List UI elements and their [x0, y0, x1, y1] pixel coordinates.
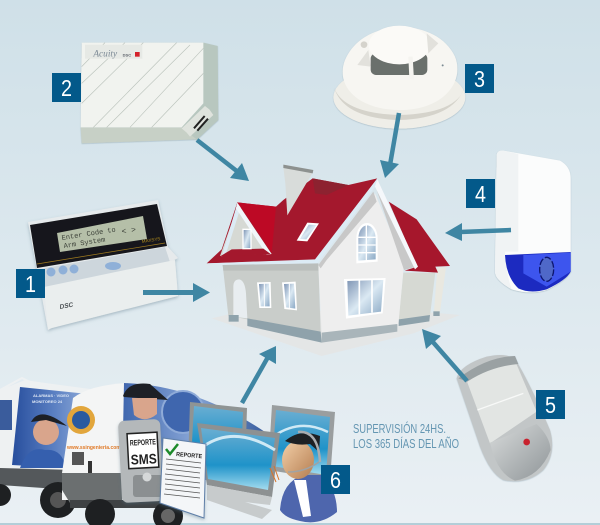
device 1: keypad: MAXSYS [141, 236, 161, 244]
large window [344, 278, 386, 319]
badge 1: 1 [25, 271, 36, 297]
phone label: REPORTE [130, 437, 157, 448]
device 2: glass-break sensor [81, 43, 218, 143]
device 2: glass-break sensor: DSC [123, 53, 131, 58]
arrow 5 [422, 329, 467, 381]
illustration: house [207, 165, 460, 356]
side windows [257, 282, 271, 308]
skylight [297, 223, 319, 241]
group 6: monitoring vans and operator [0, 378, 337, 525]
foundation [247, 318, 322, 343]
operator [270, 432, 337, 522]
device 1: keypad: Arm System [63, 236, 106, 251]
front gable wall [318, 193, 404, 333]
left wall [223, 263, 321, 333]
chimney [283, 167, 313, 215]
badge 6: 6 [330, 467, 341, 493]
arrow 6 [242, 346, 276, 403]
ground shadow [212, 310, 460, 356]
badge 6 [321, 465, 350, 494]
back monitors [188, 402, 335, 480]
main roof [207, 178, 377, 263]
device 4: siren [495, 151, 571, 292]
arched window [356, 223, 378, 263]
front monitor [197, 423, 280, 519]
arrow 4 [445, 223, 511, 241]
rear van [0, 378, 90, 518]
phone [118, 419, 164, 503]
arrow 2 [197, 140, 249, 181]
caption: SUPERVISIÓN 24HS. [353, 421, 446, 436]
rear van: ALARMAS · VIDEO [33, 393, 69, 398]
front van: www.ssingenieria.com.ar [66, 445, 127, 451]
keypad back [28, 200, 178, 330]
badge 5: 5 [545, 392, 556, 418]
device 3: smoke detector [333, 26, 465, 129]
eave trim [207, 178, 379, 265]
badge 4: 4 [475, 181, 486, 207]
keypad display [57, 216, 147, 252]
caption: LOS 365 DÍAS DEL AÑO [353, 436, 459, 451]
right annex [399, 273, 435, 319]
arrow 1 [143, 283, 210, 302]
front van [62, 383, 265, 525]
phone: SMS [130, 450, 157, 468]
device 5: motion sensor [457, 355, 552, 481]
device 1: keypad [28, 200, 178, 330]
report document: REPORTE [176, 452, 202, 460]
caption [353, 421, 459, 451]
badge 3: 3 [474, 66, 485, 92]
badge 2 [52, 73, 81, 102]
right roof [389, 202, 450, 273]
keypad buttons [40, 247, 170, 287]
rear van: MONITOREO 24 [32, 399, 63, 404]
device 1: keypad: Enter Code to [61, 227, 116, 243]
keypad cover [44, 260, 178, 329]
device 1: keypad: < > [121, 226, 137, 237]
badge 3 [465, 64, 494, 93]
badge 5 [536, 390, 565, 419]
device 2: glass-break sensor: Acuity [92, 50, 118, 60]
device 1: keypad: DSC [59, 302, 74, 311]
arrow 3 [380, 113, 399, 178]
badge 2: 2 [61, 75, 72, 101]
dormer gable [220, 207, 268, 256]
badge 4 [466, 179, 495, 208]
badge 1 [16, 269, 45, 298]
report document [160, 438, 206, 518]
